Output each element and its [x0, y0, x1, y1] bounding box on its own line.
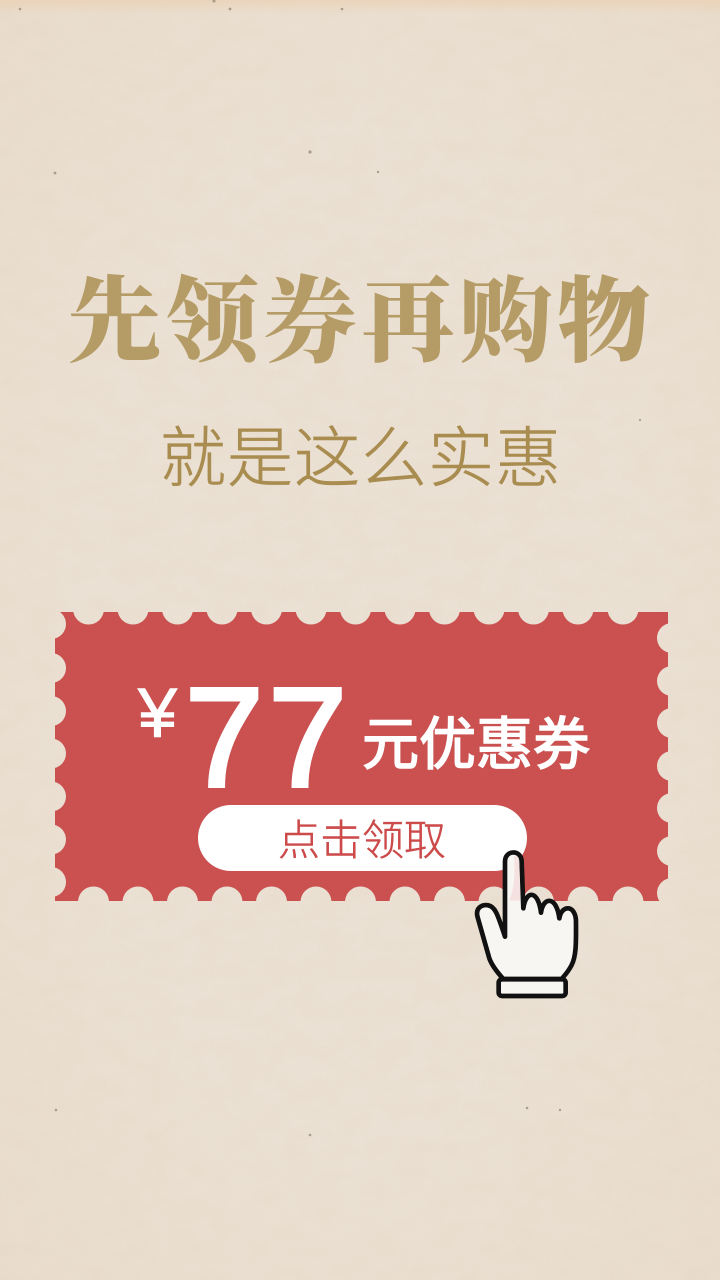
cuff [499, 979, 566, 996]
subtitle: 就是这么实惠 [160, 421, 562, 495]
button label: 点击领取 [278, 817, 446, 864]
currency symbol: ¥ [137, 674, 178, 752]
coupon amount: 77 [185, 658, 352, 816]
button [198, 805, 527, 871]
panel: coupon stamp [55, 612, 668, 901]
icon: pointing hand cursor [477, 852, 576, 996]
title: 先领券再购物 [68, 272, 655, 375]
coupon perforated background [55, 612, 668, 901]
coupon label: 元优惠券 [362, 713, 590, 777]
finger tint over coupon [509, 856, 520, 901]
